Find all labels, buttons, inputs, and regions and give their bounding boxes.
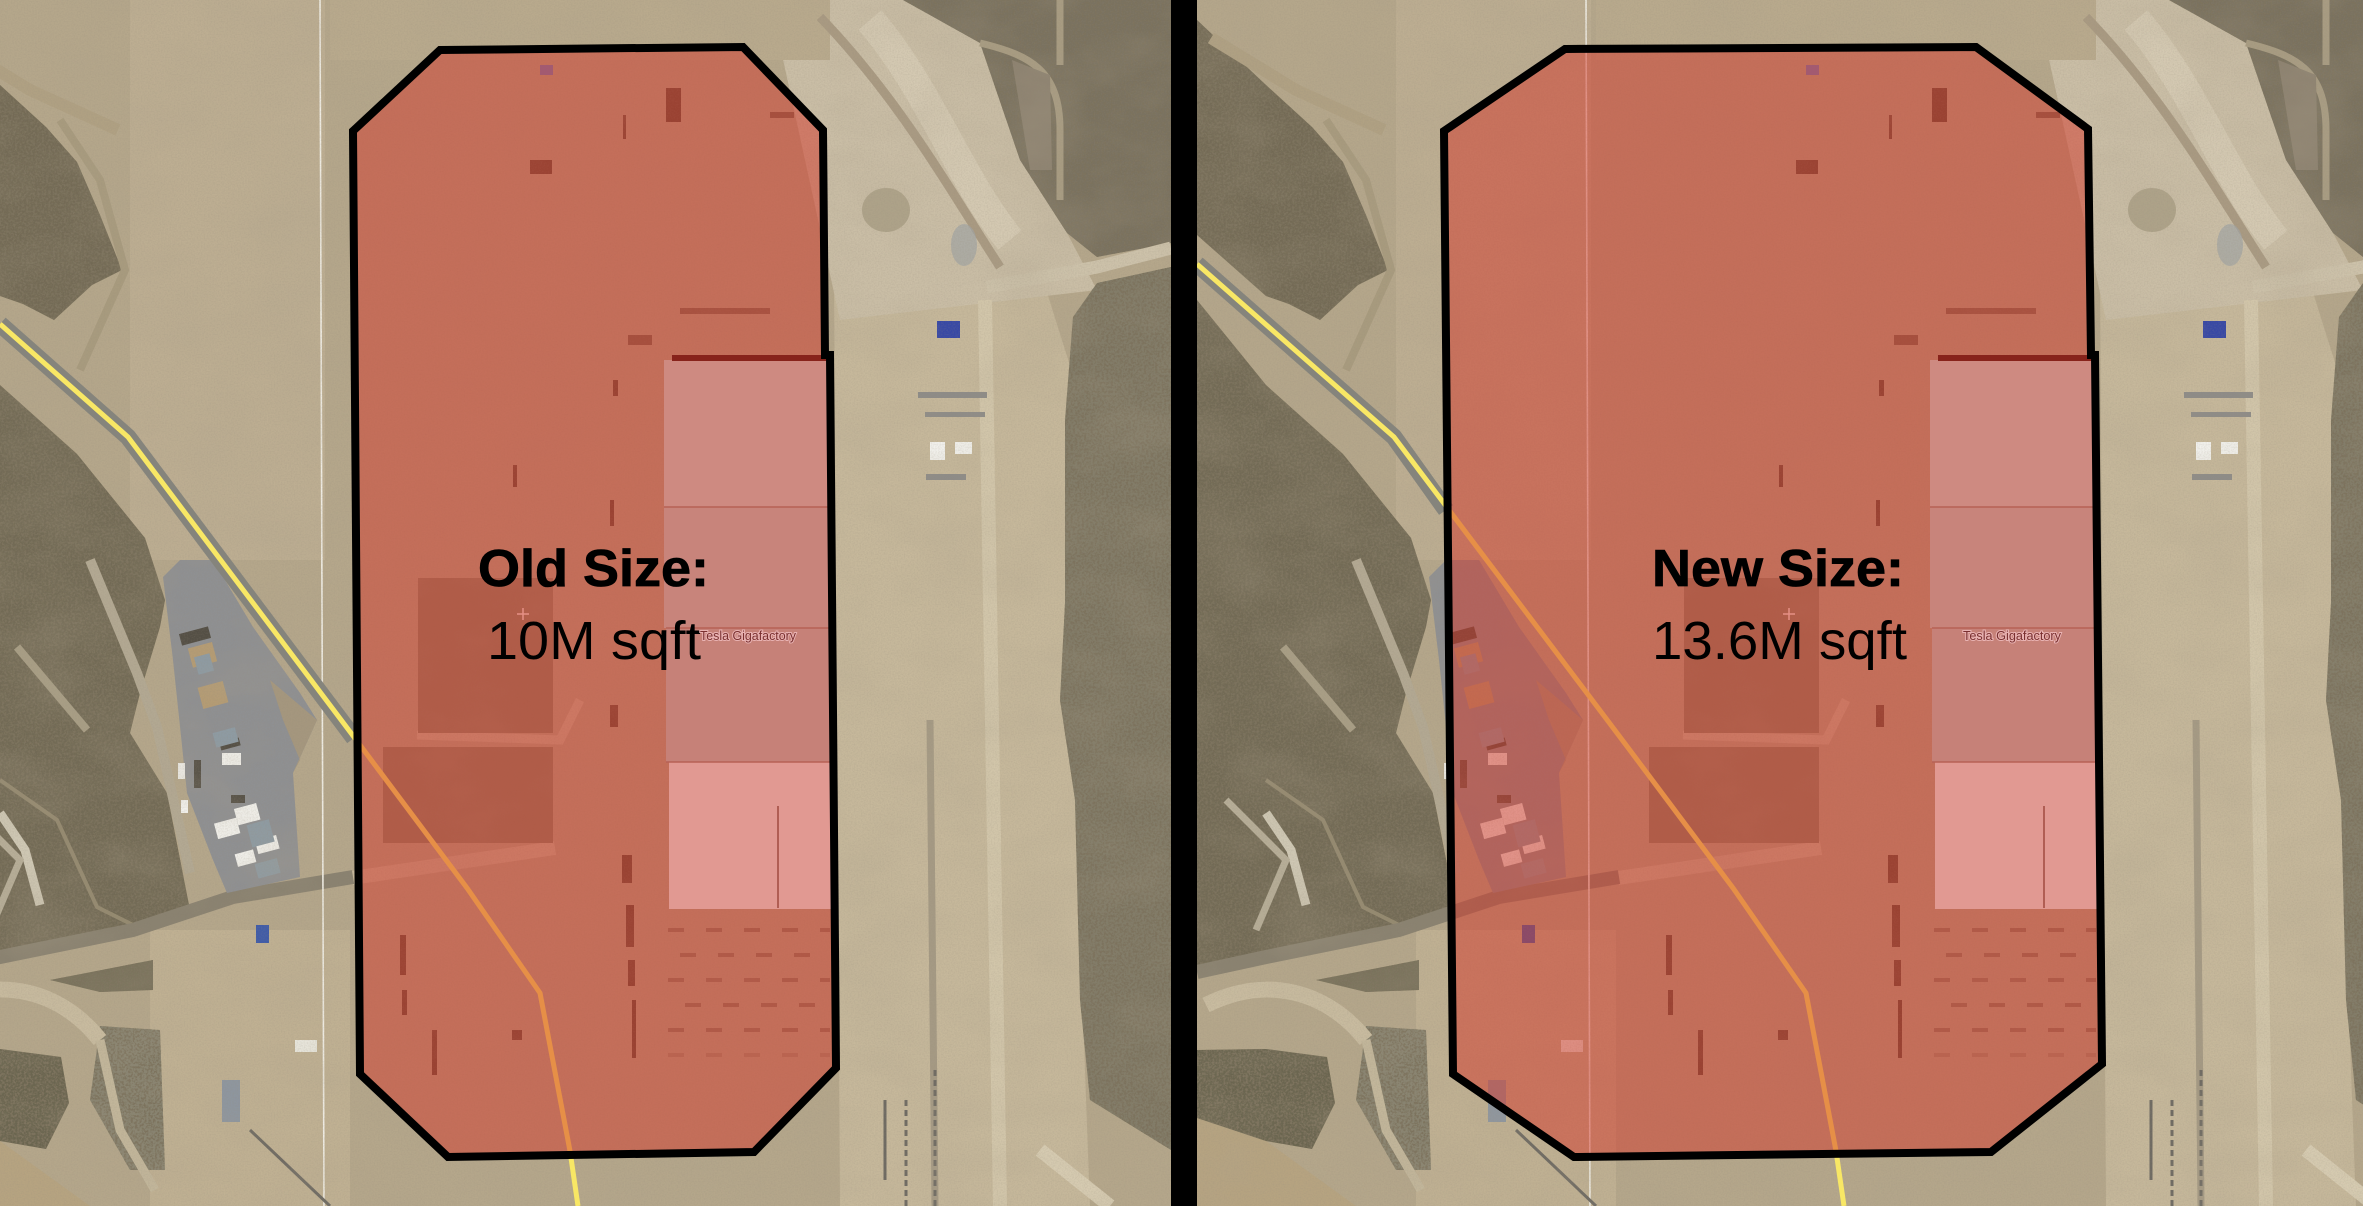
satellite map: old site [0,0,1175,1206]
satellite map: new site [1196,0,2363,1206]
value: 13.6M sqft: 13.6M sqft [1652,611,1907,671]
map label: Tesla Gigafactory: Tesla Gigafactory [700,629,797,643]
red footprint: old size [353,47,836,1157]
panel: new size [1196,0,2363,1206]
heading: new size: New Size: [1652,540,1904,598]
heading: old size: Old Size: [478,540,709,598]
highway: old site [0,324,578,1206]
value: 10M sqft: 10M sqft [487,611,701,671]
highway: new site [1197,264,1844,1206]
panel: old size [0,0,1175,1206]
map label: Tesla Gigafactory (new): Tesla Gigafactory [1963,629,2062,643]
red footprint: new size [1444,47,2102,1157]
